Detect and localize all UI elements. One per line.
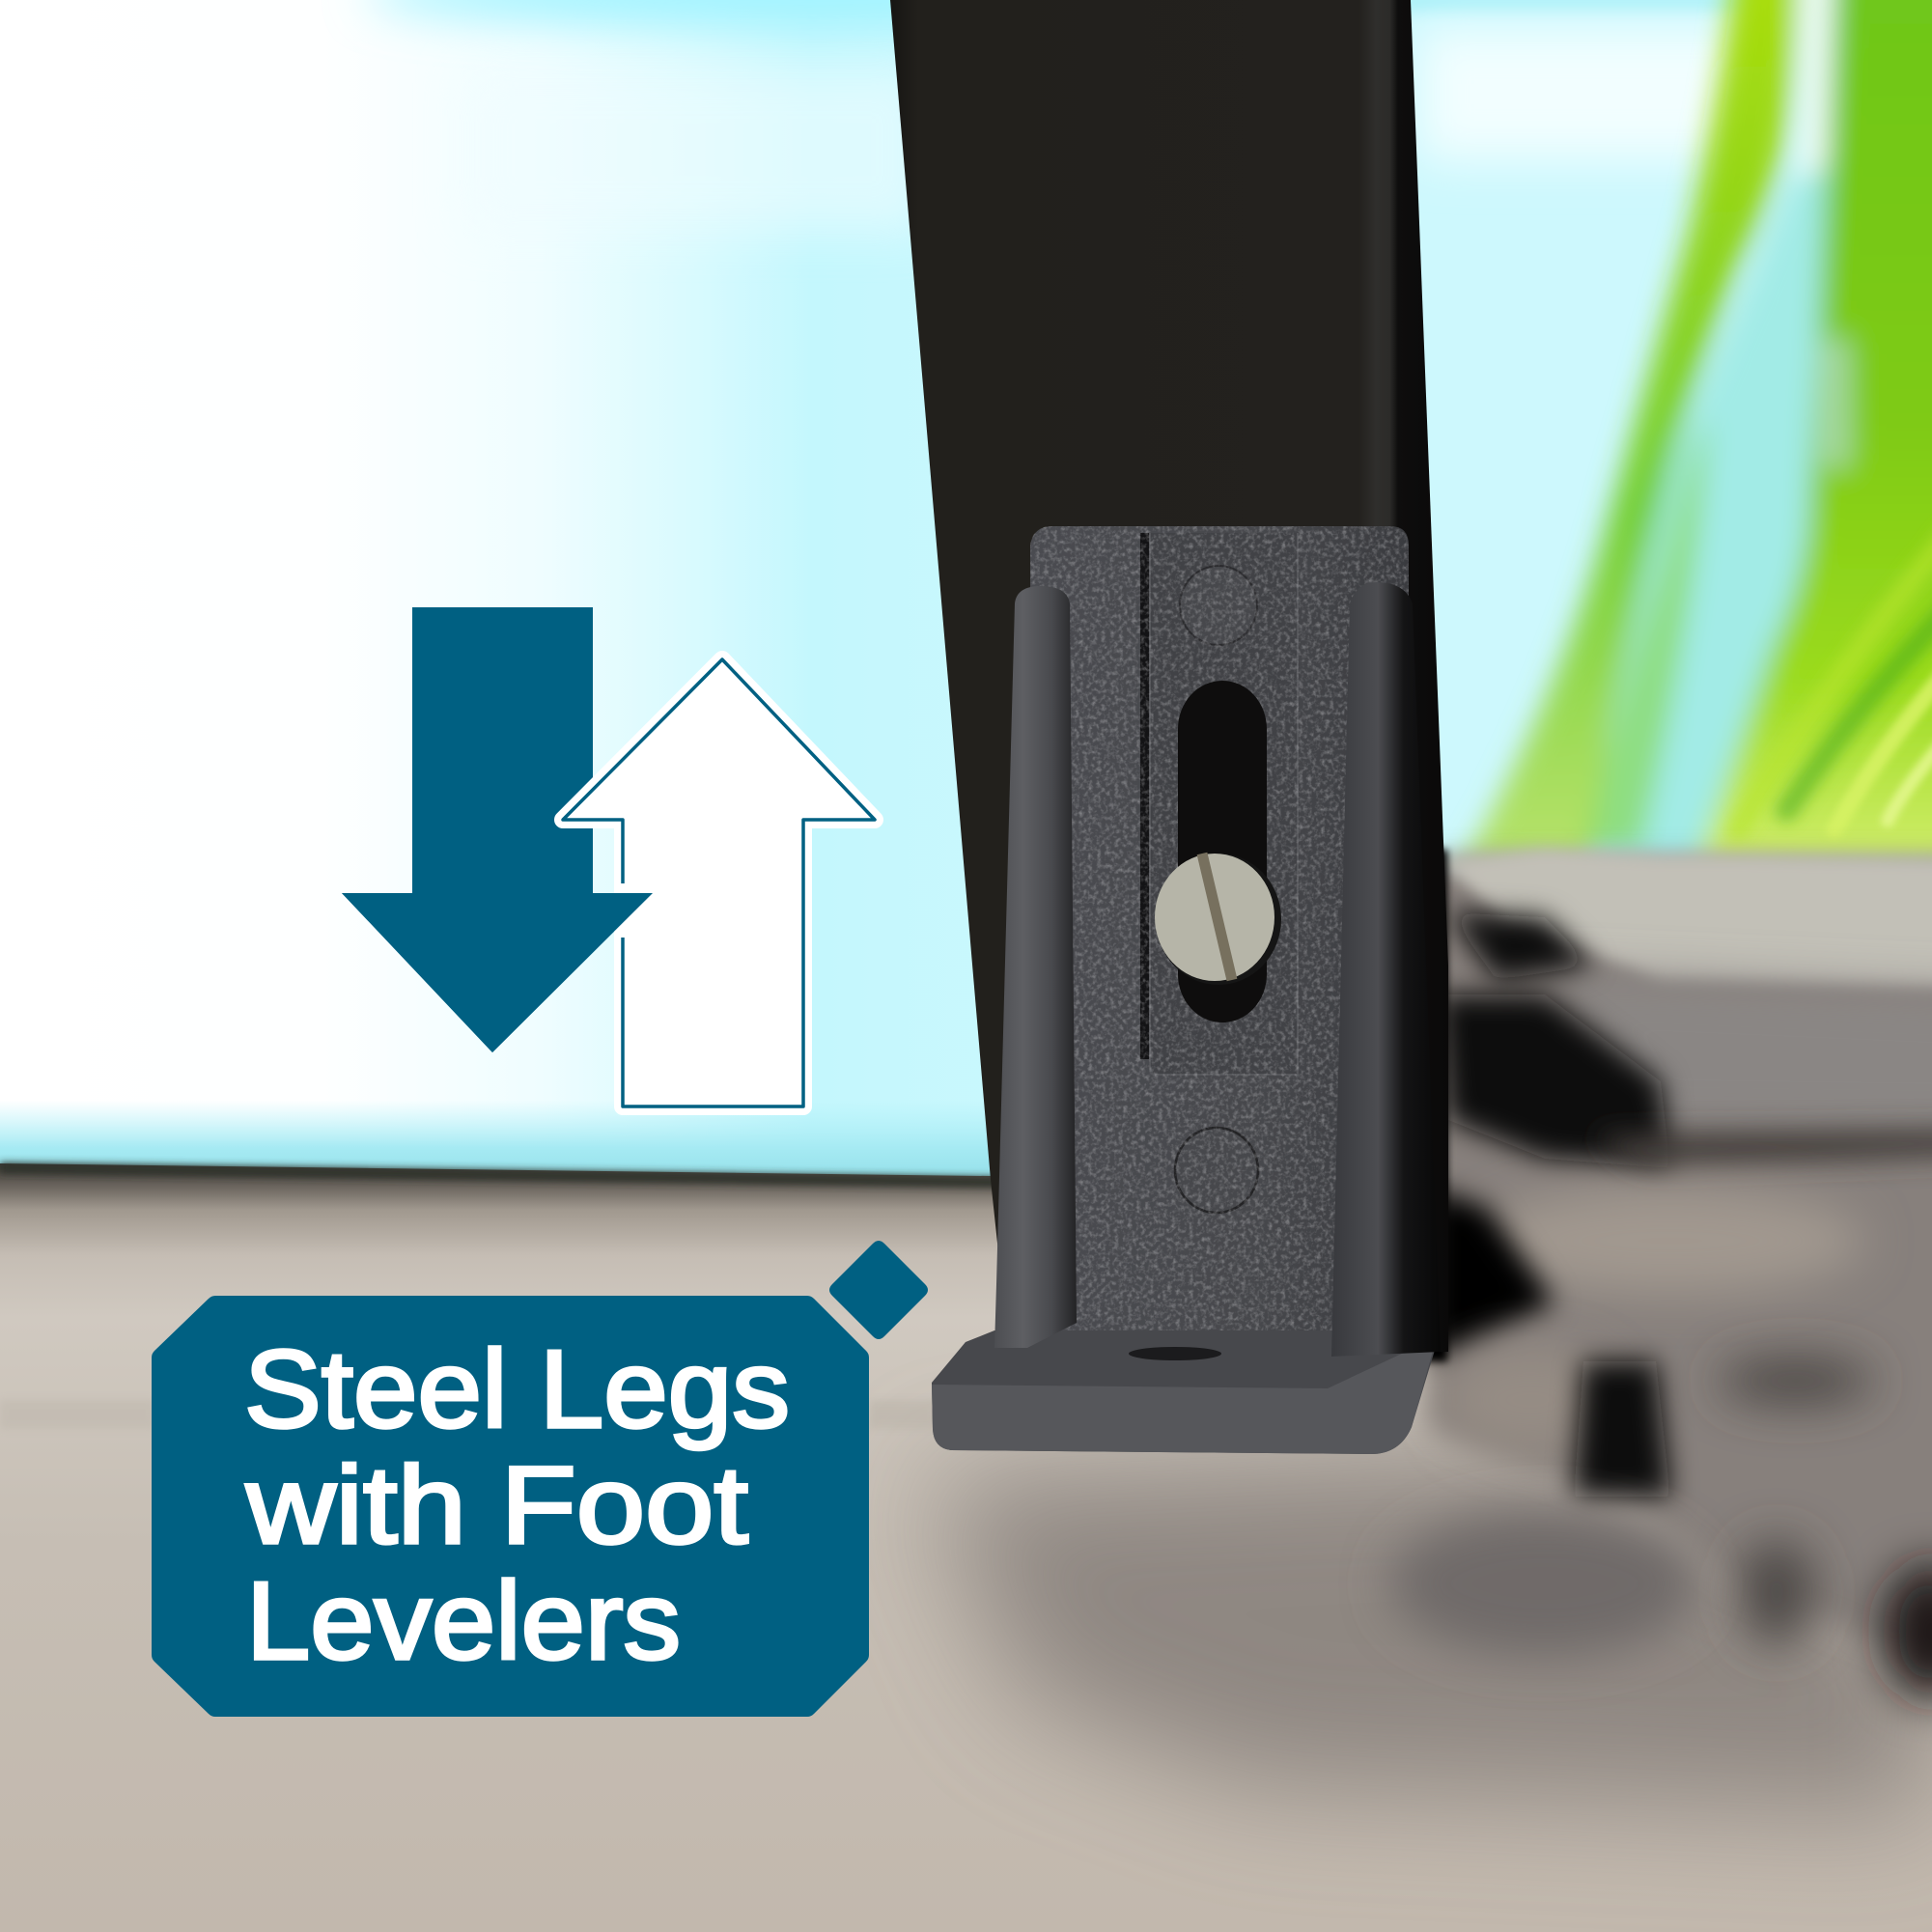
background: green grass (1458, 0, 1932, 869)
badge text: with Foot (245, 1444, 748, 1567)
arrow: down (342, 607, 653, 1052)
badge background (152, 1296, 869, 1717)
right rib (1331, 582, 1441, 1357)
background: blurred sky (0, 0, 1932, 1190)
adjustment channel outline (1140, 533, 1298, 1075)
badge text: Levelers (246, 1560, 681, 1683)
lower moulded circle (1175, 1128, 1258, 1213)
adjustment slot (1178, 681, 1267, 1022)
base foot (932, 1330, 1439, 1454)
icon: up and down arrows (342, 607, 875, 1106)
foot leveler bracket (932, 526, 1441, 1454)
metal screw head (1155, 854, 1281, 985)
badge diamond accent (829, 1241, 928, 1339)
left rib (994, 586, 1077, 1348)
arrow: up (563, 659, 875, 1106)
background: floor surface (0, 1162, 1932, 1932)
upper moulded circle (1180, 566, 1257, 645)
badge text (244, 1329, 790, 1683)
planter: grey blurred felt pot (1390, 848, 1932, 1699)
callout: label badge (152, 1241, 928, 1717)
steel table leg (890, 0, 1448, 1352)
back plate (1030, 526, 1409, 1330)
arrow: down arrowhead overlap (342, 893, 653, 1052)
badge text: Steel Legs (244, 1329, 790, 1451)
